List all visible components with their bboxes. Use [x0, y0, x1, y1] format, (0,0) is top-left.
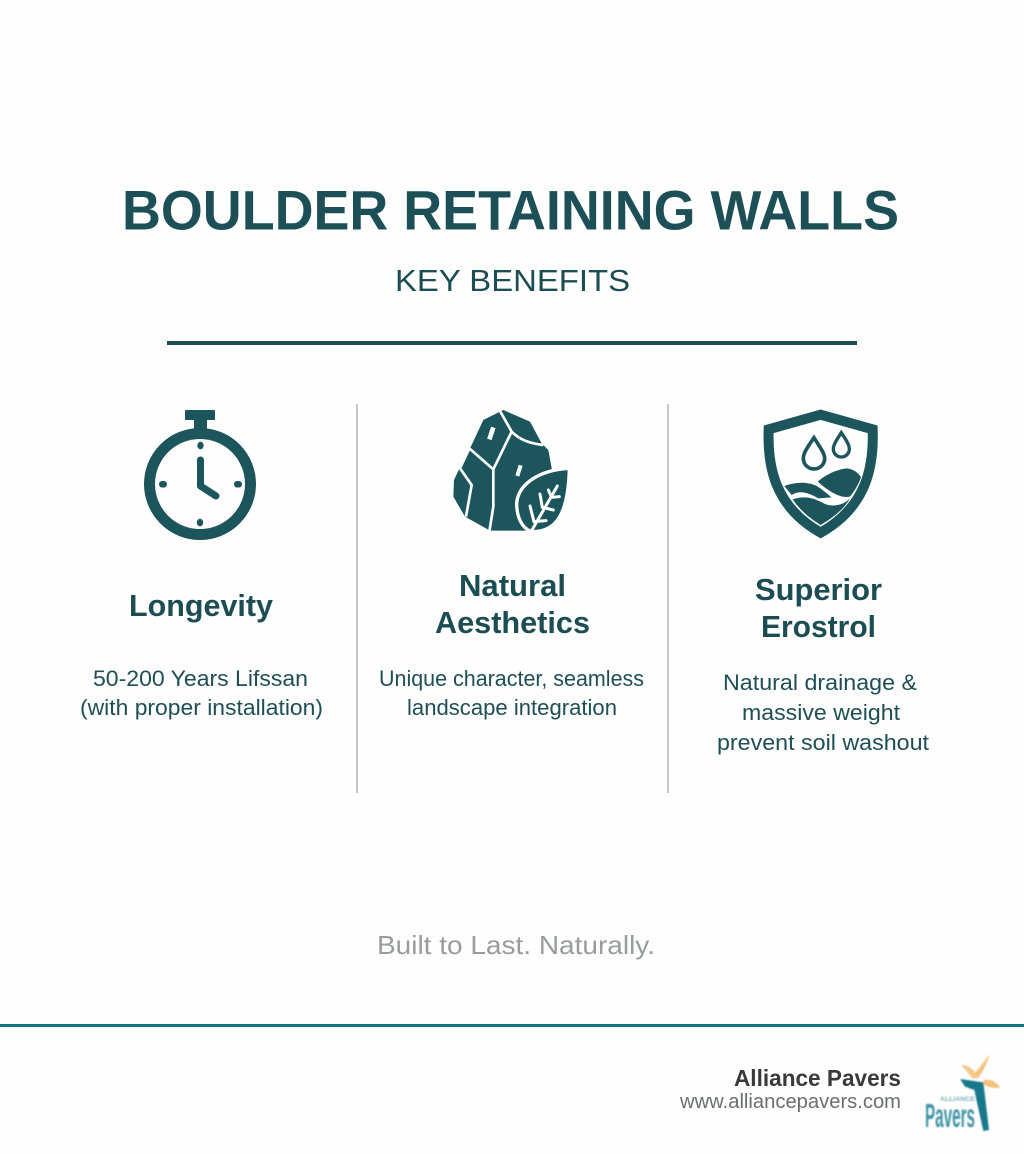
icon: stopwatch	[150, 410, 250, 534]
heading: longevity: Longevity	[129, 588, 274, 623]
logo: ALLIANCE	[940, 1096, 976, 1103]
description: longevity: 50-200 Years Lifssan	[93, 666, 308, 691]
heading: natural aesthetics: Aesthetics	[435, 605, 590, 640]
description: superior erostrol	[717, 670, 929, 755]
description: natural aesthetics: Unique character, seamless	[379, 666, 644, 691]
description: longevity: (with proper installation)	[80, 695, 323, 720]
tagline: Built to Last. Naturally.	[377, 930, 655, 960]
description: natural aesthetics: landscape integration	[407, 695, 617, 720]
heading: natural aesthetics	[435, 568, 590, 640]
logo	[925, 1054, 1000, 1134]
description: superior erostrol: massive weight	[742, 700, 900, 725]
description: longevity	[80, 666, 323, 720]
panel: natural aesthetics	[379, 410, 644, 720]
footer brand	[679, 1054, 1000, 1134]
panel: longevity	[80, 410, 323, 720]
subtitle: KEY BENEFITS	[395, 263, 630, 298]
heading: natural aesthetics: Natural	[459, 568, 566, 603]
icon: shield with water	[769, 415, 873, 533]
description: superior erostrol: prevent soil washout	[717, 730, 929, 755]
footer rule	[0, 1024, 1024, 1027]
heading: superior erostrol: Erostrol	[761, 609, 876, 644]
title: BOULDER RETAINING WALLS	[122, 178, 899, 242]
heading: superior erostrol	[755, 572, 882, 644]
company name: Alliance Pavers	[734, 1065, 901, 1091]
website: www.alliancepavers.com	[679, 1091, 901, 1113]
description: natural aesthetics	[379, 666, 644, 720]
panel: superior erosion control	[717, 415, 929, 755]
icon: boulder with leaf	[453, 410, 569, 532]
heading: superior erostrol: Superior	[755, 572, 882, 607]
description: superior erostrol: Natural drainage &	[723, 670, 917, 695]
